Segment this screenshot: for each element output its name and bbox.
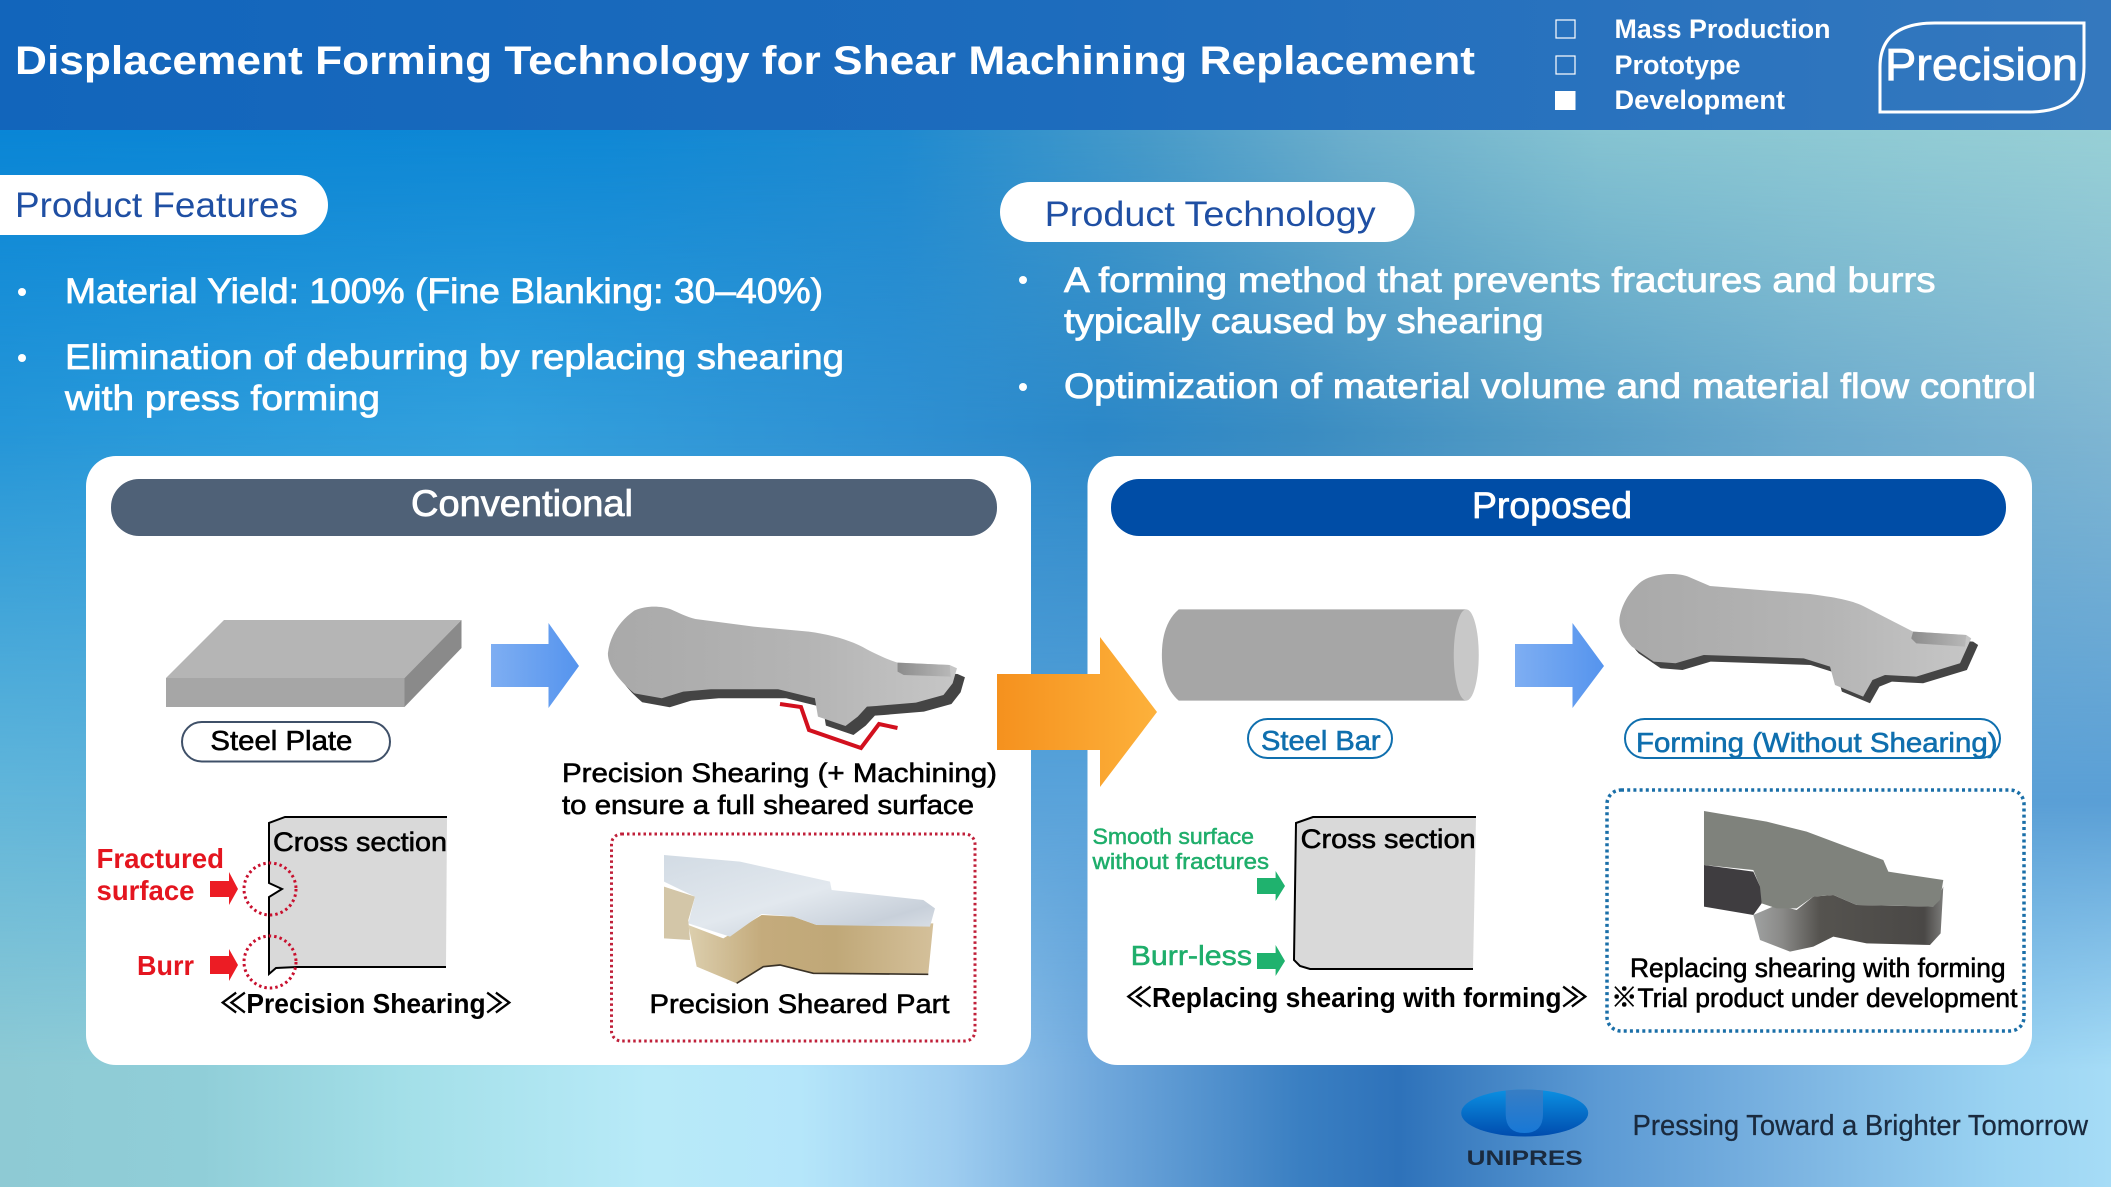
section: product technology [1000,182,2036,406]
precision shearing caption: ≪Precision Shearing≫ [220,988,512,1019]
sheared surface line [780,704,898,748]
arrow: plate to part [491,623,579,708]
arrow: fractured surface [210,872,238,905]
trial product box: ※Trial product under development [1611,983,2018,1013]
feature bullets: Elimination of deburring by replacing shearing [65,338,844,377]
fractured surface label [96,843,224,906]
panel: conventional [86,456,1031,1065]
technology bullets: A forming method that prevents fractures and burrs [1064,261,1936,300]
cross section: precision shearing [269,817,447,974]
smooth surface label [1091,824,1269,874]
header band [0,0,2111,130]
stage checklist: Mass Production [1614,14,1830,44]
heading pill: Product Technology [1045,195,1376,234]
steel bar label [1248,719,1392,758]
heading pill [1000,182,1415,242]
burr-less label: Burr-less [1131,940,1252,971]
formed part illustration [1619,574,1978,703]
feature bullets [18,272,844,418]
heading pill: Product Features [15,186,298,225]
cross section: precision shearing: Cross section [273,827,447,857]
cross section: forming [1294,817,1476,969]
forming label: Forming (Without Shearing) [1636,727,1998,758]
fractured surface label: Fractured [96,843,224,874]
burr label: Burr [137,950,194,981]
technology bullets [1019,261,2036,406]
precision sheared part box [612,834,975,1041]
technology bullets: typically caused by shearing [1064,302,1544,341]
tagline: Pressing Toward a Brighter Tomorrow [1633,1110,2089,1142]
cross section: forming: Cross section [1301,824,1476,854]
logo: unipres [1461,1090,1588,1165]
shearing caption: to ensure a full sheared surface [562,790,974,820]
arrow: burr-less [1257,945,1285,976]
stage checklist [1555,14,1830,115]
smooth surface label: Smooth surface [1092,824,1254,849]
heading pill [0,175,328,235]
conventional heading [111,479,997,536]
big orange arrow [997,637,1157,787]
shearing caption [562,758,997,820]
trial product box: Replacing shearing with forming [1630,953,2006,983]
title: Displacement Forming Technology for Shear Machining Replacement [15,39,1475,83]
steel bar label: Steel Bar [1261,725,1381,756]
technology bullets: Optimization of material volume and material flow control [1064,367,2036,406]
photo: trial product [1704,811,1943,952]
sheared part illustration [608,607,965,735]
burr callout circle [244,936,296,988]
proposed heading [1111,479,2006,536]
forming caption: ≪Replacing shearing with forming≫ [1126,982,1588,1013]
steel plate label [182,722,390,762]
section: product features [0,175,844,418]
photo: sheared part [664,855,935,983]
fracture callout circle [244,863,296,915]
arrow: smooth surface [1257,871,1285,901]
arrow: burr [210,949,238,981]
smooth surface label: without fractures [1091,849,1269,874]
fractured surface label: surface [96,875,194,906]
panel: proposed [1088,456,2032,1065]
proposed heading: Proposed [1472,485,1632,526]
feature bullets: with press forming [64,379,380,418]
steel bar illustration [1162,609,1479,701]
feature bullets: Material Yield: 100% (Fine Blanking: 30–40%) [65,272,823,311]
stage checklist: Prototype [1614,50,1740,80]
precision badge: Precision [1885,39,2078,90]
steel plate illustration [166,620,462,707]
trial product box [1607,790,2024,1031]
precision badge [1880,23,2084,112]
stage checklist: Development [1614,85,1785,115]
precision sheared part box: Precision Sheared Part [650,989,950,1019]
conventional heading: Conventional [411,483,633,524]
steel plate label: Steel Plate [210,725,352,756]
arrow: bar to part [1515,623,1604,708]
shearing caption: Precision Shearing (+ Machining) [562,758,997,788]
logo: unipres: UNIPRES [1467,1147,1583,1170]
